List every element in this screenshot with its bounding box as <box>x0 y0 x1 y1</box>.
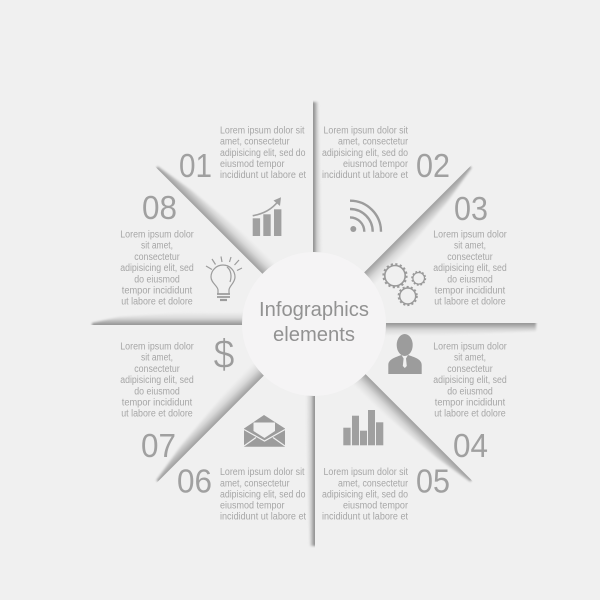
number 02: 02 <box>416 147 450 184</box>
text block 03: consectetur <box>447 252 493 263</box>
text block 04: adipisicing elit, sed <box>433 375 507 386</box>
center circle <box>242 252 386 396</box>
text block 05: amet, consectetur <box>338 478 409 489</box>
text block 02: adipisicing elit, sed do <box>322 148 408 159</box>
text block 05: adipisicing elit, sed do <box>322 489 408 500</box>
text block 08: tempor incididunt <box>122 286 192 296</box>
text block 04: sit amet, <box>454 353 486 364</box>
text block 02: Lorem ipsum dolor sit <box>324 126 408 136</box>
text block 04: consectetur <box>447 364 493 375</box>
slit: lower right <box>356 374 472 482</box>
text block 08: adipisicing elit, sed <box>120 263 194 274</box>
text block 05 <box>322 467 409 523</box>
text block 03: adipisicing elit, sed <box>433 263 507 274</box>
text block 01: adipisicing elit, sed do <box>220 148 306 159</box>
text block 07: ut labore et dolore <box>121 409 193 420</box>
slit: lower left <box>156 366 264 482</box>
text block 03: ut labore et dolore <box>434 297 506 308</box>
text block 08: do eiusmod <box>134 274 180 285</box>
text block 02 <box>322 126 409 181</box>
text block 01: incididunt ut labore et <box>220 170 306 181</box>
icon: growth chart <box>253 197 281 236</box>
infographic <box>90 100 538 548</box>
text block 03: do eiusmod <box>447 274 493 285</box>
text block 08 <box>120 230 194 308</box>
icon: person <box>388 334 422 374</box>
text block 06: adipisicing elit, sed do <box>220 489 306 500</box>
text block 07: tempor incididunt <box>122 398 192 408</box>
text block 03: sit amet, <box>454 241 486 252</box>
number 06: 06 <box>177 462 212 500</box>
text block 07: consectetur <box>134 364 180 375</box>
text block 08: sit amet, <box>141 241 173 252</box>
title: Infographics <box>259 299 369 321</box>
number 05: 05 <box>416 462 450 500</box>
text block 01: amet, consectetur <box>220 137 290 148</box>
slit: right <box>386 323 538 334</box>
number 04: 04 <box>453 427 488 464</box>
text block 07: sit amet, <box>141 353 173 364</box>
icon: open envelope <box>244 415 285 447</box>
text block 03 <box>433 230 507 308</box>
title <box>259 299 369 346</box>
slit: left <box>90 314 242 325</box>
number 07: 07 <box>141 427 176 464</box>
text block 05: eiusmod tempor <box>343 500 409 512</box>
text block 07: adipisicing elit, sed <box>120 375 194 386</box>
text block 06: eiusmod tempor <box>220 500 285 512</box>
text block 02: amet, consectetur <box>338 137 409 148</box>
text block 07: Lorem ipsum dolor <box>120 342 194 352</box>
text block 02: incididunt ut labore et <box>322 170 408 181</box>
slit: bottom <box>308 396 315 548</box>
title: elements <box>273 324 355 346</box>
icon: rss signal <box>350 201 381 232</box>
slit: upper left <box>156 166 272 274</box>
text block 02: eiusmod tempor <box>343 159 409 170</box>
text block 08: Lorem ipsum dolor <box>120 230 194 240</box>
text block 03: tempor incididunt <box>435 286 505 296</box>
text block 06: incididunt ut labore et <box>220 512 306 523</box>
text block 07: do eiusmod <box>134 386 180 397</box>
text block 01: Lorem ipsum dolor sit <box>220 126 305 136</box>
text block 08: consectetur <box>134 252 180 263</box>
text block 01: eiusmod tempor <box>220 159 285 170</box>
icon: dollar sign: $ <box>214 331 235 377</box>
number 03: 03 <box>454 190 488 227</box>
slit: upper right <box>364 166 472 282</box>
text block 07 <box>120 342 194 420</box>
text block 04: tempor incididunt <box>435 398 505 408</box>
text block 04: do eiusmod <box>447 386 493 397</box>
text block 03: Lorem ipsum dolor <box>433 230 507 240</box>
text block 04: ut labore et dolore <box>434 409 506 420</box>
icon: light bulb <box>206 256 242 300</box>
text block 05: Lorem ipsum dolor sit <box>324 467 408 478</box>
icon: bar chart <box>343 410 383 445</box>
text block 06: amet, consectetur <box>220 478 290 489</box>
number 01: 01 <box>179 147 212 184</box>
icon: gears <box>383 264 425 305</box>
text block 05: incididunt ut labore et <box>322 512 408 523</box>
text block 01 <box>220 126 306 181</box>
text block 04 <box>433 342 507 420</box>
number 08: 08 <box>142 189 177 226</box>
slit: top <box>313 100 320 252</box>
text block 06 <box>220 467 306 523</box>
text block 08: ut labore et dolore <box>121 297 193 308</box>
text block 06: Lorem ipsum dolor sit <box>220 467 305 478</box>
text block 04: Lorem ipsum dolor <box>433 342 507 352</box>
